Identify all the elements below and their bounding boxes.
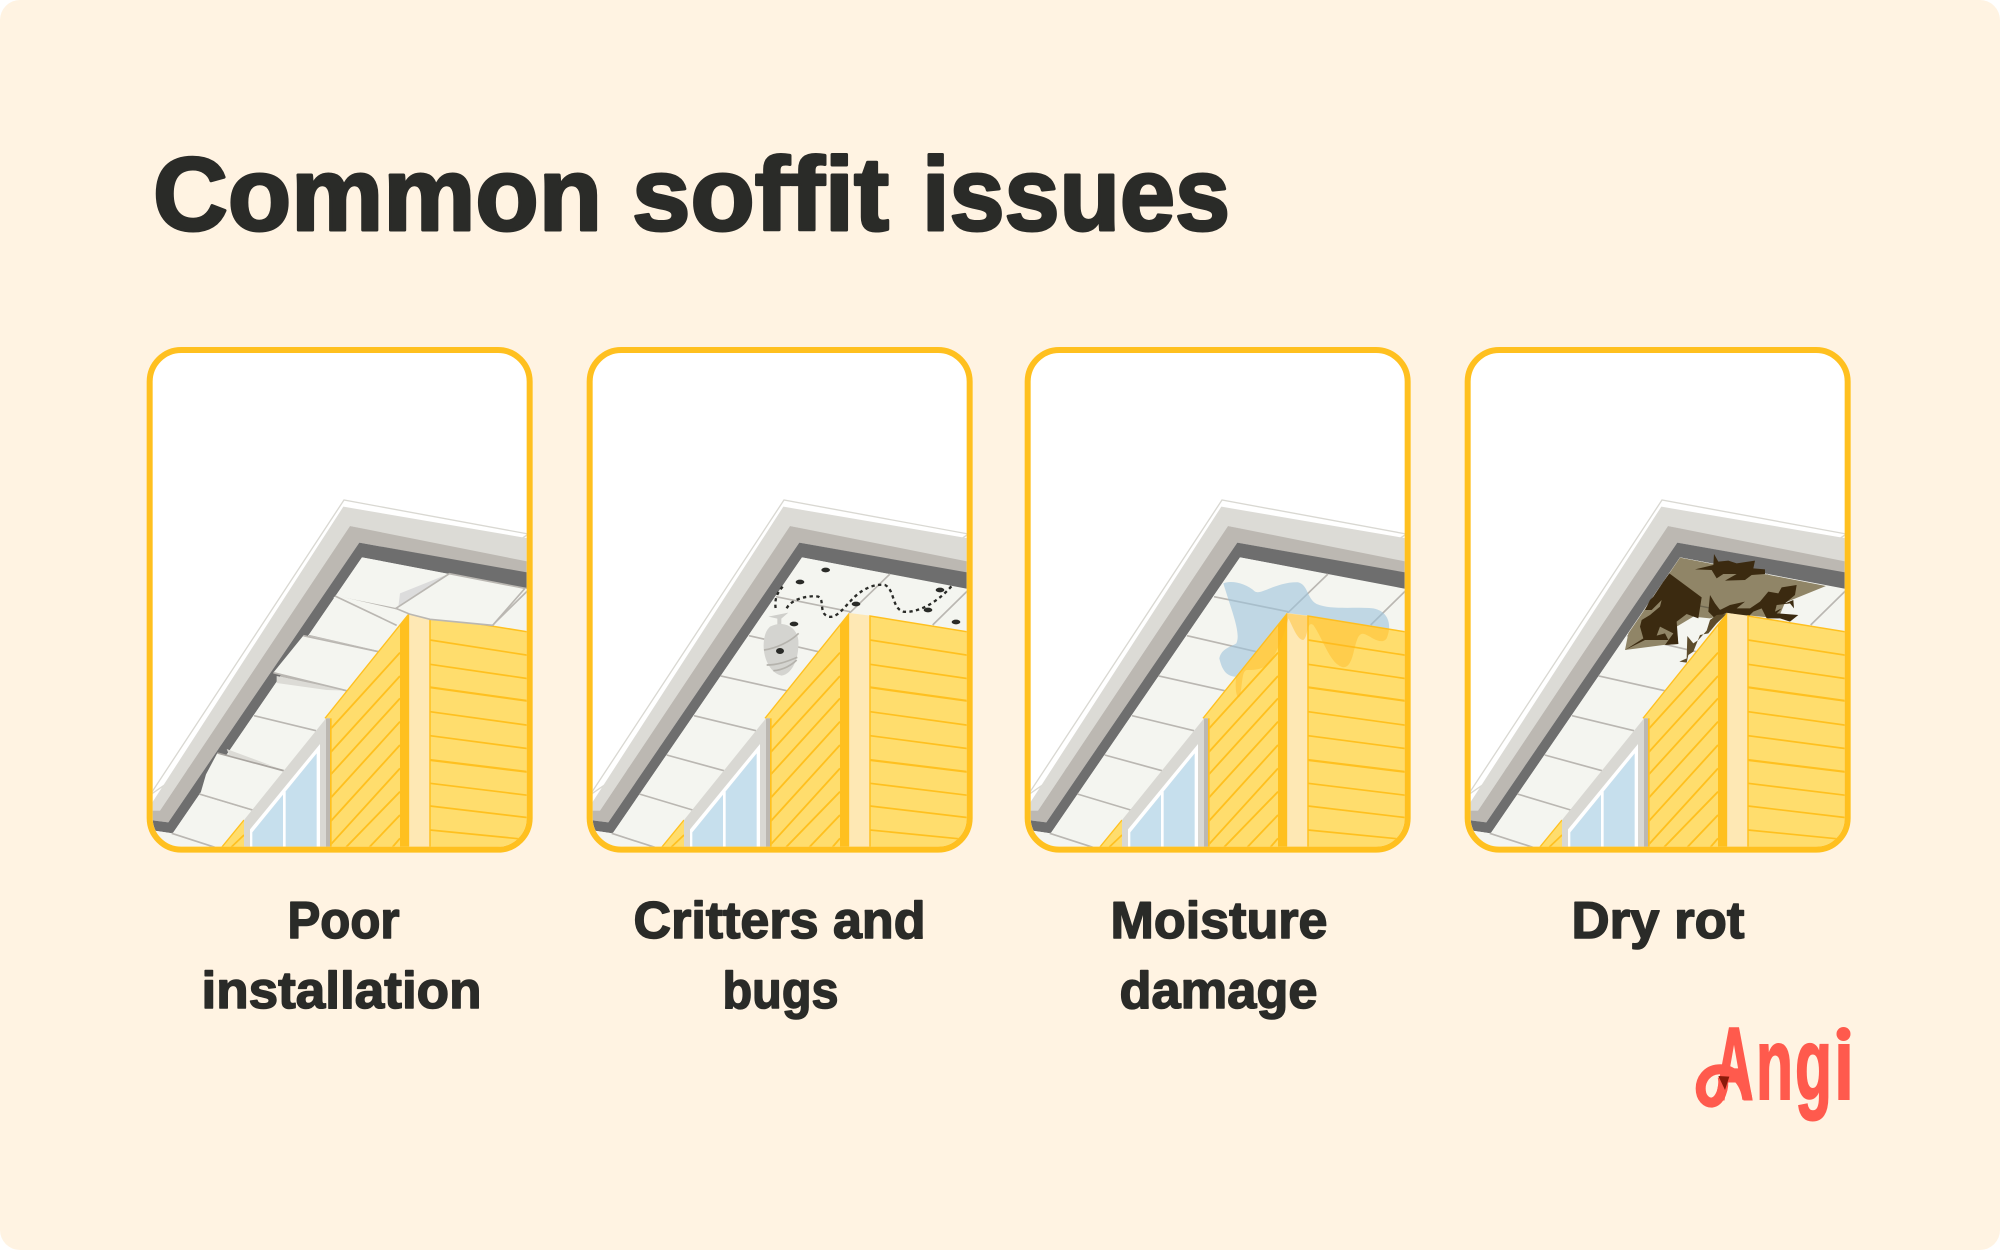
panel: dry rot [1468,350,1848,850]
label: poor installation: installation [202,962,482,1020]
title: soffit [632,137,889,253]
label: critters and bugs [634,892,926,1020]
label: poor installation [202,892,482,1020]
label: moisture damage: damage [1120,962,1318,1020]
panel: poor installation [150,350,530,850]
logo: Angi: i [1834,1007,1854,1121]
label: critters and bugs: bugs [722,962,838,1020]
logo: Angi: g [1795,1007,1832,1121]
logo: Angi: A [1715,1007,1753,1121]
label: moisture damage [1110,892,1328,1020]
rot damage [1625,554,1826,663]
label: poor installation: Poor [288,892,400,950]
label: critters and bugs: Critters and [634,892,926,950]
bug holes [790,568,960,626]
logo: Angi [1701,1007,1856,1121]
loose panel [396,574,525,625]
title: Common [153,137,602,253]
label: moisture damage: Moisture [1110,892,1328,950]
panel: moisture damage [1028,350,1408,850]
label: dry rot: Dry rot [1572,892,1744,950]
logo: Angi: n [1756,1007,1793,1121]
displaced soffit panels [199,595,410,810]
title: issues [922,137,1230,253]
bug flight path [775,585,952,617]
wasp nest [764,613,799,676]
panel: critters and bugs [590,350,970,850]
water stain on siding [1236,614,1389,697]
water stain [1219,582,1390,677]
